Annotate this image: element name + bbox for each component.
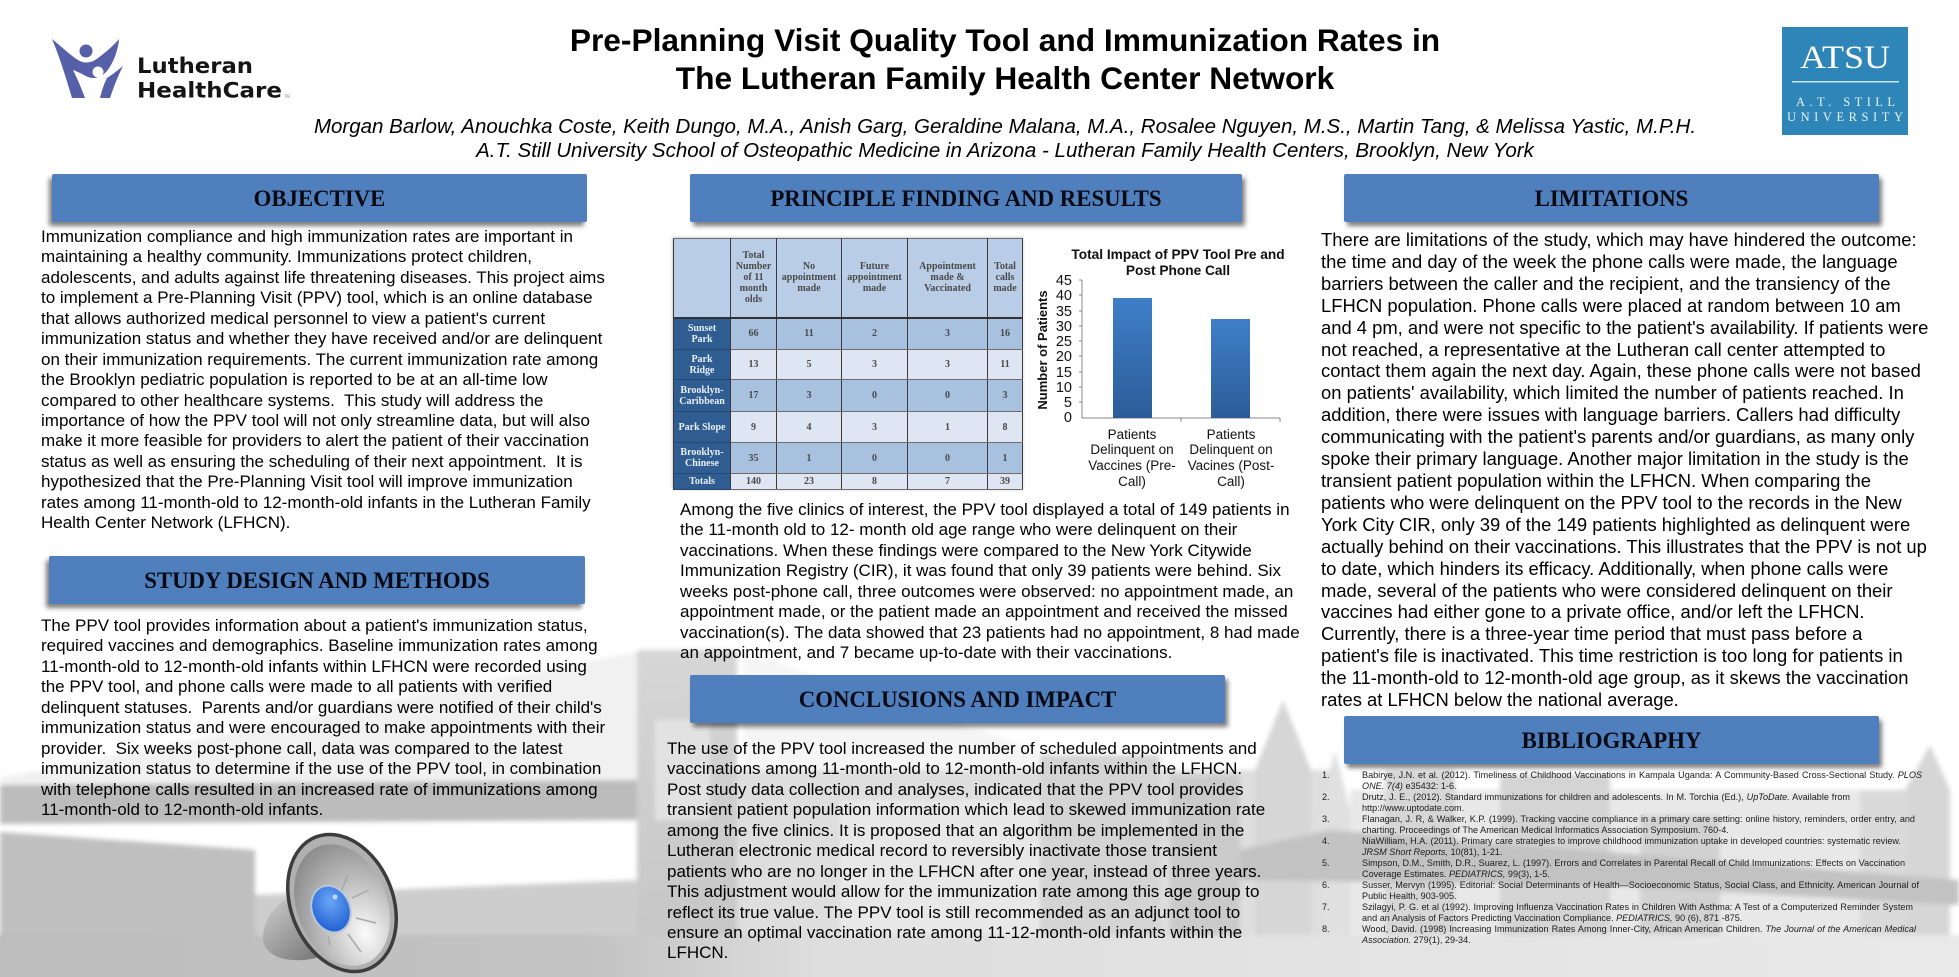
list: bibliography references: Coverage Estimates. PEDIATRICS, 99(3), 1-5.	[1362, 869, 1550, 879]
text: findings: Among the five clinics of interest, the PPV tool displayed a total of 149 patients in	[680, 500, 1290, 519]
authors and affiliations: A.T. Still University School of Osteopathic Medicine in Arizona - Lutheran Family Health Centers, Brooklyn, New York	[476, 139, 1534, 162]
table: clinic results: 4	[806, 422, 812, 432]
table: clinic results: made	[797, 283, 821, 294]
table: clinic results: of 11	[743, 272, 764, 283]
text: objective: Health Center Network (LFHCN).	[41, 513, 290, 532]
table: clinic results: Ridge	[690, 364, 714, 376]
table: clinic results: Appointment	[919, 261, 976, 272]
text: conclusions: transient patient population information which lead to skewed immunization rate	[667, 800, 1265, 819]
list: bibliography references: NiaWilliam, H.A. (2011). Primary care strategies to improve childhood immunization uptake in developed countries: systematic review.	[1362, 836, 1901, 846]
heading: limitations: LIMITATIONS	[1535, 186, 1688, 211]
text: study design: with telephone calls resulted in an increased rate of immunizations among	[41, 780, 598, 798]
text: objective: compared to other healthcare systems. This study will address the	[41, 390, 543, 410]
text: limitations: vaccines had either gone to a private office, and/or left the LFHCN.	[1321, 601, 1865, 622]
text: limitations: patients who were delinquent on the PPV tool to the records in the New	[1321, 492, 1902, 513]
table: clinic results: Chinese	[685, 458, 719, 469]
table: clinic results: Totals	[689, 476, 715, 487]
chart title: Post Phone Call	[1126, 263, 1230, 278]
text: findings: vaccinations. When these findings were compared to the New York Citywide	[680, 541, 1252, 560]
table: clinic results: 13	[748, 359, 758, 370]
logo: ATSU: A.T. STILL	[1796, 95, 1895, 109]
text: limitations: actually behind on their vaccinations. This illustrates that the PPV is not up	[1321, 536, 1927, 557]
authors and affiliations	[314, 115, 1696, 162]
text: limitations: rates at LFHCN below the national average.	[1321, 689, 1679, 710]
logo: ATSU: UNIVERSITY	[1787, 110, 1903, 124]
text: conclusions: Post study data collection and analyses, indicated that the PPV tool provides	[667, 780, 1243, 799]
table: clinic results: 3	[1002, 390, 1008, 401]
x axis labels: Delinquent on	[1189, 442, 1273, 457]
chart: total impact of PPV tool	[1035, 247, 1285, 489]
text: limitations: the 11-month-old to 12-month-old age group, as it skews the vaccination	[1321, 667, 1908, 688]
text: study design: the PPV tool, and phone calls were made to all patients with verified	[41, 677, 552, 696]
table: clinic results: 3	[806, 390, 812, 401]
table: clinic results: calls	[996, 272, 1014, 283]
list: bibliography references: 4.	[1322, 836, 1330, 846]
table: clinic results: Future	[860, 261, 889, 272]
text: limitations: York City CIR, only 39 of the 149 patients highlighted as delinquent were	[1321, 514, 1910, 535]
text: study design: The PPV tool provides information about a patient's immunization status,	[41, 616, 588, 635]
text: objective: Immunization compliance and high immunization rates are important in	[41, 227, 573, 246]
table: clinic results: 3	[945, 359, 950, 370]
y axis ticks: 15	[1056, 365, 1072, 381]
chart title: Total Impact of PPV Tool Pre and	[1071, 247, 1285, 262]
table: clinic results: 7	[945, 476, 950, 487]
heading: conclusions and impact: CONCLUSIONS AND IMPACT	[799, 687, 1116, 712]
text: limitations: the time and day of the week the phone calls were made, the language	[1321, 251, 1898, 272]
text: study design	[41, 616, 605, 819]
y axis ticks: 40	[1056, 288, 1072, 304]
table: clinic results: 23	[804, 476, 814, 487]
text: limitations: contact them again the next day. Again, these phone calls were not based	[1321, 360, 1921, 381]
text: limitations: spoke their primary language. Another major limitation in the study is the	[1321, 448, 1909, 469]
text: limitations: communicating with the patient's parents and/or guardians, as many only	[1321, 426, 1914, 447]
table: clinic results: 3	[872, 359, 877, 370]
list: bibliography references: Szilagyi, P. G. et al (1992). Improving Influenza Vaccination Rates in Children With Asthma: A Test of a Computerized Reminder System	[1362, 902, 1913, 912]
heading: objective	[52, 174, 587, 222]
table: clinic results: 5	[806, 359, 812, 370]
text: limitations: and 4 pm, and were not specific to the patient's availability. If patients were	[1321, 317, 1928, 338]
y axis ticks: 25	[1056, 334, 1072, 350]
list: bibliography references: Simpson, D.M., Smith, D.R., Suarez, L. (1997). Errors and Correlates in Parental Recall of Child Immunizations: Effects on Vaccination	[1362, 858, 1905, 868]
heading: bibliography	[1344, 716, 1879, 764]
table: clinic results: 2	[872, 328, 877, 339]
list: bibliography references	[1322, 770, 1922, 945]
title	[570, 22, 1440, 96]
text: limitations: barriers between the caller and the recipient, and the transiency of the	[1321, 273, 1890, 294]
table: clinic results: 35	[748, 452, 758, 464]
text: limitations: addition, there were issues with language barriers. Callers had difficulty	[1321, 404, 1900, 425]
text: study design: immunization status and were encouraged to make appointments with their	[41, 718, 605, 737]
table: clinic results: 39	[1000, 476, 1010, 487]
text: limitations: not reached, a representative at the Lutheran call center attempted to	[1321, 339, 1885, 360]
text: conclusions: reflect its true value. The PPV tool is still recommended as an adjunct tool to	[667, 902, 1240, 922]
table: clinic results: Caribbean	[679, 396, 725, 406]
list: bibliography references: Association. 279(1), 29-34.	[1362, 935, 1471, 945]
text: findings: an appointment, and 7 became up-to-date with their vaccinations.	[680, 643, 1172, 662]
x axis labels: Patients	[1108, 427, 1157, 442]
text: findings: the 11-month old to 12- month old age range who were delinquent on their	[680, 520, 1237, 539]
logo: ATSU	[1782, 27, 1908, 135]
list: bibliography references: 5.	[1322, 858, 1330, 868]
table: clinic results: 11	[1000, 359, 1010, 370]
logo wordmark	[137, 54, 290, 104]
text: objective: to implement a Pre-Planning Visit (PPV) tool, which is an online database	[41, 288, 593, 307]
text: objective: immunization status and whether they have received and/or are delinquent	[41, 329, 602, 348]
text: limitations: made, several of the patients who were considered delinquent on their	[1321, 580, 1892, 600]
text: conclusions	[667, 739, 1265, 962]
text: findings: weeks post-phone call, three outcomes were observed: no appointment made, an	[680, 582, 1293, 601]
table: clinic results: 1	[1002, 452, 1008, 464]
table: clinic results: 140	[746, 476, 761, 487]
logo wordmark: TM	[283, 94, 290, 99]
x axis labels	[1088, 427, 1274, 489]
list: bibliography references: charting. Proceedings of The American Medical Informatics Association Symposium. 760-4.	[1362, 825, 1729, 835]
text: limitations: to date, which hinders its efficacy. Additionally, when phone calls were	[1321, 558, 1888, 579]
table: clinic results: month	[740, 283, 767, 294]
list: bibliography references: Flanagan, J. R, & Walker, K.P. (1999). Tracking vaccine compliance in a primary care setting: online history, reminders, order entry, and	[1362, 814, 1915, 824]
text: study design: 11-month-old to 12-month-old infants.	[41, 800, 323, 819]
text: study design: delinquent statuses. Parents and/or guardians were notified of their child's	[41, 698, 602, 717]
y axis ticks: 35	[1056, 304, 1072, 320]
text: objective: hypothesized that the Pre-Planning Visit tool will improve immunization	[41, 472, 573, 491]
table: clinic results: made &	[930, 272, 965, 283]
heading: principle finding and results	[690, 174, 1242, 222]
text: objective: on their immunization requirements. The current immunization rate among	[41, 350, 598, 369]
table: clinic results: 16	[1000, 328, 1010, 339]
x axis labels: Vacines (Post-	[1188, 458, 1274, 473]
list: bibliography references: http://www.uptodate.com.	[1362, 803, 1464, 813]
table: clinic results: made	[863, 283, 886, 294]
heading: objective: OBJECTIVE	[254, 186, 385, 211]
title: The Lutheran Family Health Center Network	[676, 60, 1334, 96]
table: clinic results: Park	[691, 334, 713, 345]
text: conclusions: patients who are no longer in the LFHCN after one year, instead of three years.	[667, 862, 1261, 881]
table: clinic results: Park	[691, 354, 713, 364]
list: bibliography references: Public Health, 903-905.	[1362, 891, 1457, 901]
heading: study design and methods	[49, 556, 585, 604]
text: conclusions: among the five clinics. It is proposed that an algorithm be implemented in the	[667, 821, 1244, 840]
text: objective: the Brooklyn pediatric population is reported to be at an all-time low	[41, 370, 548, 389]
text: study design: provider. Six weeks post-phone call, data was compared to the latest	[41, 739, 563, 758]
table: clinic results: 66	[748, 328, 758, 339]
text: objective: rates among 11-month-old to 12-month-old infants in the Lutheran Family	[41, 493, 591, 512]
x axis labels: Patients	[1207, 427, 1256, 442]
table: clinic results: Total	[994, 261, 1016, 272]
text: findings	[680, 500, 1300, 662]
table: clinic results: 0	[872, 452, 877, 464]
table: clinic results: 17	[748, 390, 758, 401]
list: bibliography references: Susser, Mervyn (1995). Editorial: Social Determinants of Health—Socioeconomic Status, Social Class, and Ethnicity. American Journal of	[1362, 880, 1919, 890]
table: clinic results: Park Slope	[679, 422, 725, 432]
heading: principle finding and results: PRINCIPLE FINDING AND RESULTS	[770, 186, 1162, 211]
y axis ticks: 30	[1056, 319, 1072, 335]
list: bibliography references: Wood, David. (1998) Increasing Immunization Rates Among Inner-City, African American Children. The Journal of the American Medical	[1362, 924, 1916, 934]
text: conclusions: This adjustment would allow for the immunization rate among this age group to	[667, 882, 1259, 901]
table: clinic results: Brooklyn-	[680, 447, 724, 458]
table: clinic results: made	[993, 283, 1017, 294]
table: clinic results: Sunset	[688, 323, 716, 334]
list: bibliography references: Babirye, J.N. et al. (2012). Timeliness of Childhood Vaccinations in Kampala Uganda: A Community-Based Cross-Sectional Study. PLOS	[1362, 770, 1922, 780]
table: clinic results: 3	[872, 422, 877, 432]
list: bibliography references: ONE. 7(4) e35432: 1-6.	[1362, 781, 1457, 791]
table: clinic results: Vaccinated	[924, 283, 971, 294]
x axis labels: Call)	[1217, 474, 1245, 489]
text: objective: status as well as ensuring the scheduling of their next appointment. It is	[41, 452, 582, 471]
text: limitations: There are limitations of the study, which may have hindered the outcome:	[1321, 229, 1917, 250]
text: study design: required vaccines and demographics. Baseline immunization rates among	[41, 636, 598, 655]
table: clinic results: Brooklyn-	[680, 384, 724, 396]
y axis label: Number of Patients	[1035, 290, 1050, 410]
text: limitations: transient patient population within the LFHCN. When comparing the	[1321, 470, 1871, 491]
table: clinic results: 11	[804, 328, 814, 339]
heading: study design and methods: STUDY DESIGN AND METHODS	[144, 568, 490, 593]
x axis labels: Call)	[1118, 474, 1146, 489]
y axis ticks: 45	[1056, 273, 1072, 289]
text: limitations: on patients' availability, which limited the number of patients reached. In	[1321, 382, 1904, 403]
y axis ticks: 20	[1056, 349, 1072, 365]
text: objective: adolescents, and adults against life threatening diseases. This project aims	[41, 268, 605, 287]
list: bibliography references: and an Analysis of Factors Predicting Vaccination Compliance. PEDIATRICS, 90 (6), 871 -875.	[1362, 913, 1742, 923]
icon: Lutheran figures	[52, 39, 123, 98]
table: clinic results: 0	[945, 452, 950, 464]
title: Pre-Planning Visit Quality Tool and Immunization Rates in	[570, 22, 1440, 58]
table: clinic results: 3	[945, 328, 950, 339]
table: clinic results: No	[803, 261, 815, 272]
logo: Lutheran HealthCare	[52, 39, 290, 102]
table: clinic results: 8	[872, 476, 877, 487]
text: limitations: LFHCN population. Phone calls were placed at random between 10 am	[1321, 295, 1901, 316]
chart title	[1071, 247, 1285, 278]
bars	[1113, 298, 1250, 418]
text: objective: make it more feasible for providers to alert the patient of their vaccination	[41, 431, 589, 450]
table: clinic results: 1	[945, 422, 950, 432]
table: clinic results: appointment	[782, 272, 836, 283]
text: conclusions: LFHCN.	[667, 943, 728, 962]
text: study design: 11-month-old to 12-month-old infants within LFHCN were recorded using	[41, 657, 587, 676]
text: findings: appointment made, or the patient made an appointment and received the missed	[680, 602, 1288, 621]
text: objective: importance of how the PPV tool will not only streamline data, but will also	[41, 411, 590, 430]
text: objective	[41, 227, 605, 532]
text: limitations: Currently, there is a three-year time period that must pass before a	[1321, 623, 1862, 644]
list: bibliography references: 8.	[1322, 924, 1330, 934]
heading: limitations	[1344, 174, 1879, 222]
list: bibliography references: 1.	[1322, 770, 1330, 780]
text: limitations	[1321, 229, 1928, 710]
icon: audio speaker	[263, 832, 398, 974]
list: bibliography references: Drutz, J. E., (2012). Standard immunizations for children and adolescents. In M. Torchia (Ed.), UpToDate. Available from	[1362, 792, 1850, 802]
text: objective: maintaining a healthy community. Immunizations protect children,	[41, 247, 532, 266]
table: clinic results: 9	[751, 422, 756, 432]
list: bibliography references: 6.	[1322, 880, 1330, 890]
table: clinic results: 8	[1002, 422, 1008, 432]
y axis ticks: 10	[1056, 380, 1072, 396]
table: clinic results: 0	[872, 390, 877, 401]
list: bibliography references: JRSM Short Reports, 10(81), 1-21.	[1362, 847, 1503, 857]
heading: conclusions and impact	[690, 675, 1225, 723]
y axis ticks: 0	[1064, 410, 1072, 426]
list: bibliography references: 2.	[1322, 792, 1330, 802]
text: objective: that allows authorized medical personnel to view a patient's current	[41, 309, 545, 328]
logo wordmark: Lutheran	[137, 54, 253, 79]
text: conclusions: Lutheran electronic medical record to reversibly inactivate those transient	[667, 841, 1217, 860]
text: study design: immunization status to determine if the use of the PPV tool, in combination	[41, 759, 601, 778]
text: conclusions: vaccinations among 11-month-old to 12-month-old infants within the LFHCN.	[667, 759, 1242, 778]
table: clinic results: appointment	[847, 272, 902, 283]
table: clinic results	[673, 238, 1022, 489]
table: clinic results: Total	[743, 250, 764, 261]
table: clinic results: 0	[945, 390, 950, 401]
list: bibliography references: 3.	[1322, 814, 1330, 824]
text: limitations: patient's file is inactivated. This time restriction is too long for patients in	[1321, 645, 1903, 666]
table: clinic results: 1	[806, 452, 812, 464]
text: findings: vaccination(s). The data showed that 23 patients had no appointment, 8 had made	[680, 623, 1300, 642]
table: clinic results: Number	[736, 261, 771, 272]
x axis labels: Delinquent on	[1090, 442, 1174, 457]
y axis ticks	[1056, 273, 1072, 426]
y axis ticks: 5	[1064, 395, 1072, 411]
heading: bibliography: BIBLIOGRAPHY	[1522, 728, 1701, 753]
text: conclusions: The use of the PPV tool increased the number of scheduled appointments and	[667, 739, 1257, 758]
table: clinic results: olds	[745, 294, 762, 305]
logo: ATSU: ATSU	[1800, 40, 1890, 76]
authors and affiliations: Morgan Barlow, Anouchka Coste, Keith Dungo, M.A., Anish Garg, Geraldine Malana, M.A., Rosalee Nguyen, M.S., Martin Tang, & Melissa Yastic, M.P.H.	[314, 115, 1696, 138]
list: bibliography references: 7.	[1322, 902, 1330, 912]
x axis labels: Vaccines (Pre-	[1088, 458, 1176, 473]
text: findings: Immunization Registry (CIR), it was found that only 39 patients were behind. Six	[680, 561, 1281, 580]
text: conclusions: ensure an optimal vaccination rate among 11-12-month-old infants within the	[667, 923, 1242, 942]
